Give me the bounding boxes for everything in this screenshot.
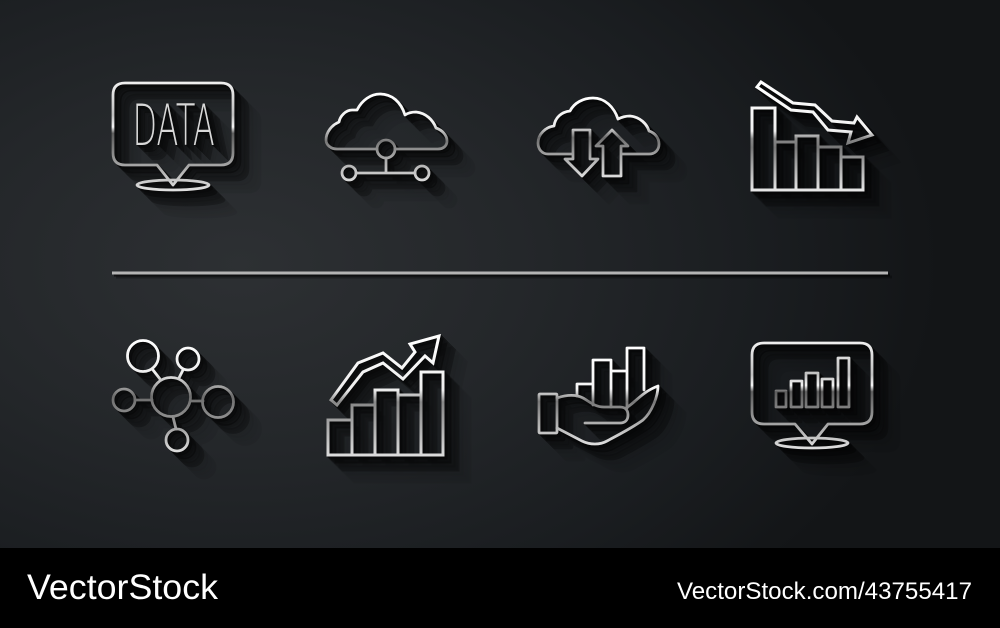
- icon: hand holding chart: [539, 348, 658, 444]
- icon: cloud upload and download: [538, 98, 659, 176]
- divider line: [112, 272, 888, 274]
- footer image id text: VectorStock.com/43755417: [677, 578, 972, 605]
- icon: falling bar chart: [752, 82, 872, 190]
- icon: cloud network: [326, 94, 447, 180]
- icon: chart location pin: [752, 343, 872, 448]
- footer logo text: VectorStock: [27, 568, 219, 607]
- label: DATA: DATA: [132, 92, 215, 159]
- icon: rising bar chart: [328, 336, 443, 455]
- icon: molecule network: [113, 340, 234, 451]
- footer bar: [0, 548, 1000, 628]
- icon: DATA location pin: [113, 83, 233, 190]
